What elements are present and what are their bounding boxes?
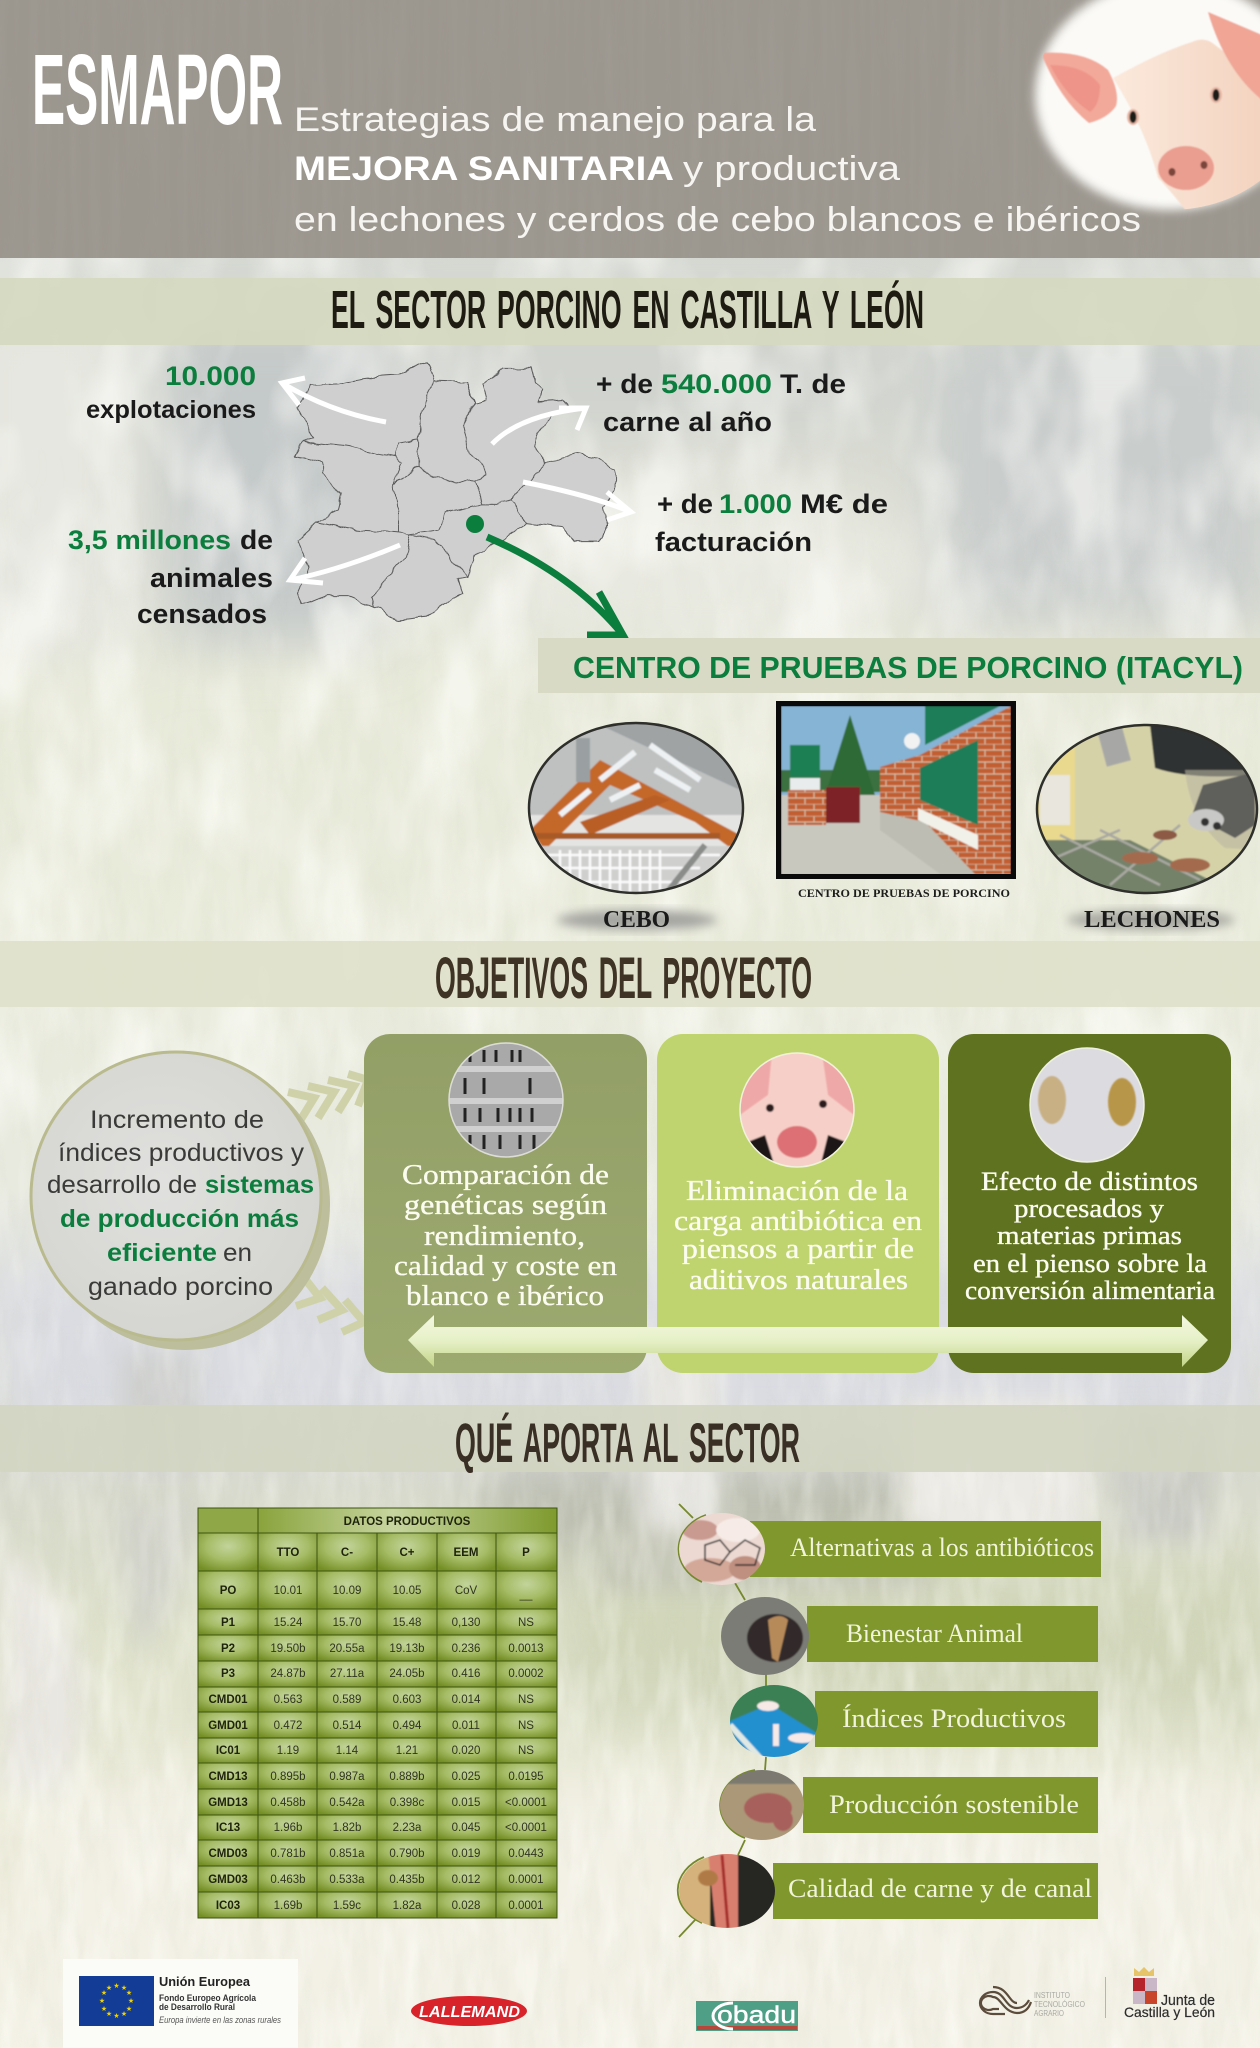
subtitle: Estrategias de manejo para la — [294, 101, 816, 139]
list item: calidad — [678, 1852, 1098, 1930]
table: datos productivos: 27.11a — [330, 1668, 365, 1680]
table: datos productivos: 0.889b — [389, 1771, 425, 1783]
callout stat: carne: 540.000 — [661, 369, 772, 399]
panel: objective circle: desarrollo de — [47, 1171, 197, 1199]
subtitle — [294, 101, 1141, 239]
photo: lechones room — [1035, 722, 1260, 897]
panel: antibiotic card: aditivos naturales — [689, 1265, 908, 1296]
text: OBJETIVOS DEL PROYECTO — [435, 946, 812, 1011]
list item: indices — [728, 1683, 1098, 1760]
table: datos productivos: 0.533a — [329, 1874, 365, 1886]
table: datos productivos: NS — [518, 1745, 534, 1757]
table: datos productivos: 1.21 — [396, 1745, 418, 1757]
connector line for list — [678, 1504, 766, 1937]
heading: centro de pruebas: CENTRO DE PRUEBAS DE PORCINO (ITACYL) — [573, 650, 1243, 685]
arrow: animales — [290, 545, 400, 583]
callout stat: carne — [596, 369, 846, 437]
panel: objective circle: en — [223, 1239, 252, 1267]
logo: Union Europea: ★ — [126, 2005, 132, 2013]
table: datos productivos: 0.458b — [270, 1797, 306, 1809]
table: datos productivos: 0.0013 — [508, 1643, 544, 1655]
panel: genetics card: Comparación de — [402, 1160, 609, 1191]
logo: Junta de Castilla y Leon: Junta de — [1161, 1992, 1215, 2009]
table: datos productivos: 15.48 — [393, 1617, 421, 1629]
table: datos productivos: 0.014 — [452, 1694, 481, 1706]
callout stat: animales — [68, 525, 273, 629]
logo: Cobadu: obadu — [717, 2002, 796, 2029]
list item: produccion sostenible — [718, 1768, 1098, 1842]
logo: Instituto Tecnologico Agrario: INSTITUTO — [1034, 1991, 1070, 2000]
table: datos productivos: IC13 — [216, 1822, 240, 1834]
table: datos productivos: 0.028 — [452, 1900, 480, 1912]
callout stat: carne: T. de — [780, 369, 846, 399]
list item: produccion sostenible: Producción sostenible — [829, 1790, 1079, 1819]
table: datos productivos: 0.0195 — [508, 1771, 544, 1783]
table: datos productivos: DATOS PRODUCTIVOS — [344, 1516, 471, 1528]
label: cebo — [557, 907, 717, 933]
label: lechones: LECHONES — [1084, 907, 1220, 933]
table: datos productivos: 15.24 — [274, 1617, 303, 1629]
table: datos productivos: P2 — [221, 1643, 235, 1655]
logo: Instituto Tecnologico Agrario: TECNOLÓGICO — [1034, 2000, 1085, 2009]
logo: Union Europea: ★ — [113, 1982, 120, 1990]
panel: objective circle: de producción más — [60, 1205, 299, 1233]
logo: Union Europea: de Desarrollo Rural — [159, 2002, 235, 2013]
icon: piglet face — [740, 1053, 854, 1167]
table: datos productivos: NS — [518, 1720, 534, 1732]
subtitle: MEJORA SANITARIA — [294, 150, 674, 188]
logo: Union Europea: ★ — [128, 1997, 134, 2005]
icon: piglet photo in header — [1035, 0, 1260, 230]
logo: Instituto Tecnologico Agrario — [980, 1987, 1085, 2018]
table: datos productivos: 1.82b — [333, 1822, 361, 1834]
list item: indices: Índices Productivos — [842, 1704, 1066, 1733]
header band — [0, 0, 1260, 258]
table: datos productivos: 19.50b — [270, 1643, 306, 1655]
table: datos productivos: 0.015 — [452, 1797, 480, 1809]
table: datos productivos: 10.05 — [393, 1585, 421, 1597]
table: datos productivos: C+ — [399, 1547, 415, 1559]
panel: feed card — [948, 1034, 1231, 1373]
arrow: to testing centre — [487, 537, 623, 635]
list item: alternativas: Alternativas a los antibióticos — [790, 1533, 1094, 1562]
photo: testing centre entrance — [776, 701, 1016, 879]
table: datos productivos: GMD13 — [208, 1797, 248, 1809]
panel: genetics card: blanco e ibérico — [406, 1281, 604, 1312]
callout stat: animales: de — [240, 525, 273, 555]
table: datos productivos: 0.045 — [452, 1822, 480, 1834]
logo: Instituto Tecnologico Agrario: AGRARIO — [1034, 2009, 1064, 2018]
panel: objective circle: sistemas — [205, 1171, 314, 1199]
table: datos productivos: P — [522, 1547, 530, 1559]
table: datos productivos: 0.012 — [452, 1874, 480, 1886]
table: datos productivos: 0.0001 — [508, 1900, 544, 1912]
logo: Union Europea — [63, 1959, 298, 2048]
divider logos — [1105, 1977, 1106, 2018]
table: datos productivos: 0.781b — [270, 1848, 306, 1860]
map: Castilla y León provinces — [296, 363, 615, 620]
table: datos productivos: NS — [518, 1694, 534, 1706]
table: datos productivos: 0.398c — [390, 1797, 425, 1809]
list item: alternativas — [679, 1513, 1101, 1585]
table: datos productivos: 0.0443 — [508, 1848, 544, 1860]
panel: objective circle: ganado porcino — [88, 1273, 273, 1301]
table: datos productivos: 0.603 — [393, 1694, 421, 1706]
map marker — [466, 515, 484, 533]
list item: bienestar: Bienestar Animal — [846, 1619, 1023, 1648]
callout stat: explotaciones: 10.000 — [165, 361, 256, 391]
section band: el sector porcino — [0, 278, 1260, 345]
panel: feed card: Efecto de distintos — [981, 1167, 1198, 1196]
chevrons: top — [288, 1074, 368, 1124]
band: centro de pruebas — [538, 638, 1260, 693]
table: datos productivos: 0.416 — [452, 1668, 480, 1680]
table: datos productivos: P1 — [221, 1617, 236, 1629]
photo: cebo barn — [525, 720, 750, 901]
table: datos productivos: 2.23a — [393, 1822, 422, 1834]
table: datos productivos: 15.70 — [333, 1617, 361, 1629]
logo: Union Europea: ★ — [106, 1984, 112, 1992]
table: datos productivos: 20.55a — [329, 1643, 365, 1655]
table: datos productivos: CMD01 — [209, 1694, 248, 1706]
table: datos productivos: 19.13b — [389, 1643, 425, 1655]
subtitle: en lechones y cerdos de cebo blancos e ibéricos — [294, 201, 1141, 239]
table: datos productivos: GMD01 — [208, 1720, 248, 1732]
table: datos productivos: CoV — [455, 1585, 478, 1597]
table: datos productivos: NS — [518, 1617, 534, 1629]
table: datos productivos: 0.435b — [389, 1874, 425, 1886]
table: datos productivos: 1.19 — [277, 1745, 299, 1757]
table: datos productivos: 1.82a — [393, 1900, 422, 1912]
table: datos productivos: 0.472 — [274, 1720, 302, 1732]
logo: Union Europea: ★ — [126, 1989, 132, 1997]
logo: Union Europea: Unión Europea — [159, 1974, 251, 1989]
logo: Junta de Castilla y Leon — [1124, 1967, 1215, 2020]
table: datos productivos: 0.589 — [333, 1694, 361, 1706]
table: datos productivos: 0.019 — [452, 1848, 480, 1860]
logo: Lallemand — [411, 1996, 527, 2026]
table: datos productivos: IC03 — [216, 1900, 240, 1912]
table: datos productivos: 0.790b — [389, 1848, 425, 1860]
table: datos productivos: 1.14 — [336, 1745, 359, 1757]
callout stat: facturacion: + de — [657, 489, 713, 519]
logo: Union Europea: ★ — [121, 1984, 127, 1992]
list item: calidad: Calidad de carne y de canal — [788, 1874, 1092, 1903]
callout stat: carne: carne al año — [603, 407, 772, 437]
callout stat: explotaciones — [86, 361, 256, 424]
text: ESMAPOR — [32, 34, 283, 146]
icon: feed pellets — [1030, 1048, 1144, 1162]
table: datos productivos: C- — [341, 1547, 353, 1559]
panel: genetics card: calidad y coste en — [394, 1251, 617, 1282]
logo: Lallemand: LALLEMAND — [419, 2004, 520, 2021]
table: datos productivos: 0.895b — [270, 1771, 306, 1783]
panel: objective circle: índices productivos y — [58, 1139, 305, 1167]
arrow: facturacion — [523, 482, 631, 520]
table: datos productivos: 0.987a — [329, 1771, 365, 1783]
table: datos productivos — [198, 1508, 557, 1918]
icon: gel image — [449, 1043, 563, 1157]
callout stat: explotaciones: explotaciones — [86, 396, 256, 424]
table: datos productivos: CMD13 — [209, 1771, 247, 1783]
table: datos productivos: 0.542a — [329, 1797, 365, 1809]
table: datos productivos: 0.0002 — [508, 1668, 544, 1680]
table: datos productivos: 0.514 — [333, 1720, 362, 1732]
panel: antibiotic card: carga antibiótica en — [674, 1206, 922, 1237]
table: datos productivos: 1.59c — [333, 1900, 361, 1912]
panel: antibiotic card: Eliminación de la — [686, 1176, 909, 1207]
arrow: explotaciones — [282, 378, 386, 422]
logo: Junta de Castilla y Leon: Castilla y León — [1124, 2004, 1215, 2020]
table: datos productivos: __ — [519, 1589, 533, 1601]
table: datos productivos: 0.025 — [452, 1771, 480, 1783]
table: datos productivos: <0.0001 — [505, 1822, 547, 1834]
table: datos productivos: P3 — [221, 1668, 235, 1680]
table: datos productivos: 1.69b — [274, 1900, 302, 1912]
arrow: carne — [492, 408, 586, 444]
panel: objective circle — [31, 1052, 330, 1350]
logo: Union Europea: ★ — [101, 2005, 107, 2013]
logo: Union Europea: Europa invierte en las zonas rurales — [159, 2015, 281, 2025]
panel: feed card: conversión alimentaria — [965, 1276, 1215, 1305]
table: datos productivos: 1.96b — [274, 1822, 302, 1834]
table: datos productivos: 0.563 — [274, 1694, 302, 1706]
logo: Union Europea: ★ — [121, 2010, 127, 2018]
panel: genetics card: genéticas según — [404, 1190, 607, 1221]
callout stat: carne: + de — [596, 369, 653, 399]
logo: Union Europea: Fondo Europeo Agrícola — [159, 1993, 257, 2004]
table: datos productivos: 0.494 — [393, 1720, 422, 1732]
callout stat: facturacion: M€ de — [800, 489, 888, 519]
table: datos productivos: 0.851a — [329, 1848, 365, 1860]
table: datos productivos: 10.01 — [274, 1585, 302, 1597]
table: datos productivos: CMD03 — [209, 1848, 247, 1860]
table: datos productivos: IC01 — [216, 1745, 241, 1757]
arrow: double headed — [408, 1315, 1208, 1367]
caption: centro de pruebas: CENTRO DE PRUEBAS DE PORCINO — [798, 886, 1010, 900]
logo: Union Europea: ★ — [101, 1989, 107, 1997]
panel: objective circle: eficiente — [107, 1239, 217, 1267]
callout stat: animales: censados — [137, 599, 267, 629]
table: datos productivos: <0.0001 — [505, 1797, 547, 1809]
list item: bienestar — [720, 1595, 1098, 1677]
callout stat: animales: animales — [150, 563, 273, 593]
panel: genetics card — [364, 1034, 647, 1373]
table: datos productivos: 0.463b — [270, 1874, 306, 1886]
panel: antibiotic card: piensos a partir de — [682, 1234, 914, 1265]
chevrons: bottom — [296, 1275, 364, 1332]
table: datos productivos: EEM — [454, 1547, 478, 1559]
logo: Union Europea: ★ — [99, 1997, 105, 2005]
panel: antibiotic card — [657, 1034, 939, 1373]
table: datos productivos: 0.020 — [452, 1745, 480, 1757]
table: datos productivos: 10.09 — [333, 1585, 361, 1597]
table: datos productivos: 24.87b — [270, 1668, 306, 1680]
logo: Cobadu — [696, 2001, 798, 2031]
section band: que aporta — [0, 1405, 1260, 1472]
subtitle: y productiva — [683, 150, 900, 188]
panel: objective circle: Incremento de — [90, 1106, 264, 1134]
table: datos productivos: TTO — [277, 1547, 299, 1559]
table: datos productivos: 0,130 — [452, 1617, 480, 1629]
table: datos productivos: 0.011 — [452, 1720, 480, 1732]
table: datos productivos: 0.0001 — [508, 1874, 544, 1886]
logo: Union Europea: ★ — [106, 2010, 112, 2018]
text: QUÉ APORTA AL SECTOR — [455, 1411, 800, 1474]
table: datos productivos: PO — [220, 1585, 236, 1597]
panel: feed card: procesados y — [1014, 1194, 1164, 1223]
table: datos productivos: 0.236 — [452, 1643, 480, 1655]
label: cebo: CEBO — [603, 907, 670, 933]
panel: feed card: materias primas — [997, 1221, 1182, 1250]
callout stat: facturacion — [655, 489, 888, 557]
callout stat: animales: 3,5 millones — [68, 525, 231, 555]
section band: objetivos — [0, 941, 1260, 1007]
logo: Union Europea: ★ — [113, 2012, 120, 2020]
panel: feed card: en el pienso sobre la — [973, 1249, 1208, 1278]
callout stat: facturacion: 1.000 — [719, 489, 792, 519]
callout stat: facturacion: facturación — [655, 527, 812, 557]
table: datos productivos: 24.05b — [389, 1668, 425, 1680]
panel: genetics card: rendimiento, — [424, 1221, 585, 1252]
table: datos productivos: GMD03 — [208, 1874, 248, 1886]
